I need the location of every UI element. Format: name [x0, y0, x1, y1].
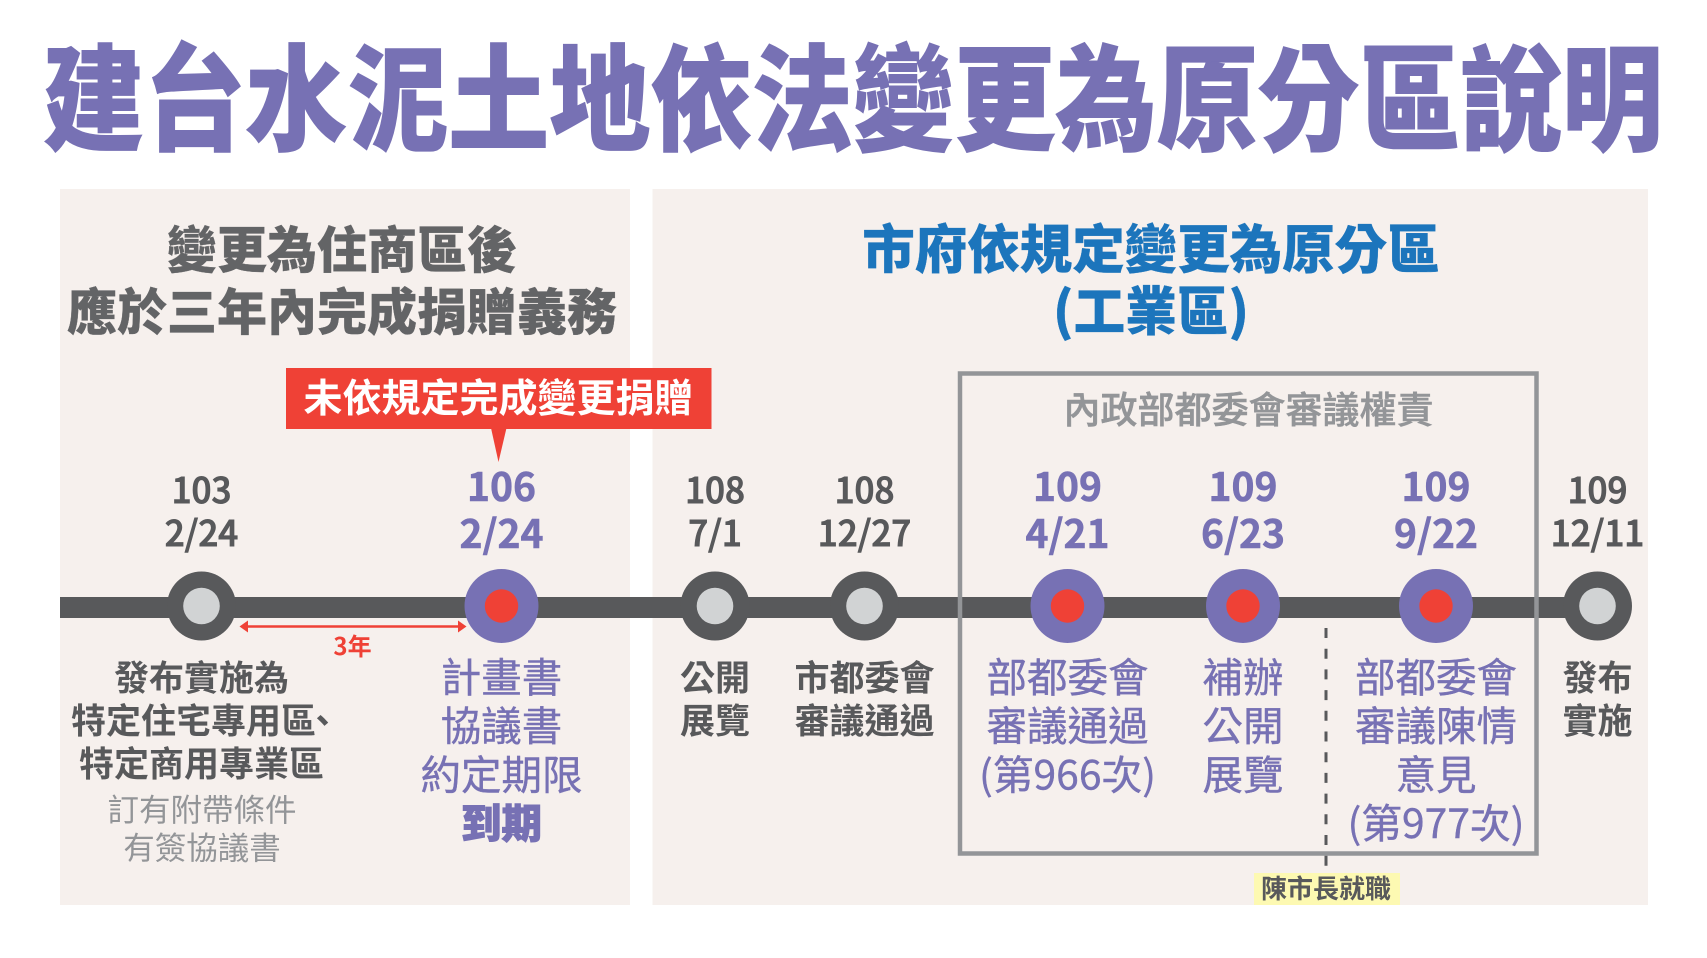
node: 109 9/22: 9/22 [1394, 504, 1478, 560]
node: 109 4/21: 4/21 [1025, 504, 1110, 560]
node: 106 2/24: 協議書 [441, 694, 562, 752]
node: 108 7/1: 7/1 [688, 506, 742, 557]
heading: right panel [862, 208, 1440, 346]
node: 109 6/23: 109 [1208, 457, 1278, 513]
node: 103 2/24: 特定住宅專用區、 [71, 694, 340, 744]
node: 103 2/24: 特定商用專業區 [79, 736, 324, 788]
node: 109 6/23: 補辦 [1202, 645, 1284, 704]
review committee box: 內政部都委會審議權責 [1064, 380, 1434, 434]
node: 109 4/21: 109 [1033, 457, 1102, 513]
node: 106 2/24: 2/24 [459, 504, 544, 560]
node: 109 12/11: 實施 [1562, 694, 1633, 744]
node: 109 4/21: 審議通過 [986, 694, 1148, 752]
node: 109 12/11 [1551, 463, 1644, 744]
tag: mayor inauguration: 陳市長就職 [1261, 869, 1391, 906]
node: 109 4/21: (第966次) [979, 742, 1156, 802]
node: 103 2/24: 發布實施為 [114, 650, 289, 702]
arrow: three years: 3年 [333, 627, 372, 662]
review committee box [960, 374, 1536, 854]
node: 109 9/22: 意見 [1396, 742, 1476, 802]
node: 109 6/23: 展覽 [1202, 742, 1284, 802]
node: 108 12/27: 12/27 [818, 506, 911, 557]
node: 109 9/22: 部都委會 [1355, 645, 1517, 704]
node: 106 2/24: 計畫書 [441, 645, 562, 704]
node: 108 7/1 [680, 463, 750, 744]
node: 109 12/11: 12/11 [1551, 506, 1644, 557]
node: 109 6/23: 公開 [1202, 694, 1284, 752]
node: 106 2/24: 106 [467, 457, 536, 513]
dashed marker line [1324, 628, 1328, 867]
heading: right panel: (工業區) [1053, 270, 1249, 346]
node: 108 7/1: 公開 [680, 650, 750, 702]
node: 103 2/24: 2/24 [165, 506, 238, 557]
callout: red: 未依規定完成變更捐贈 [303, 368, 694, 424]
node: 108 12/27: 108 [835, 463, 894, 514]
node: 109 12/11: 109 [1568, 463, 1627, 514]
heading: right panel: 市府依規定變更為原分區 [862, 208, 1440, 284]
callout: red [286, 368, 712, 462]
node: 109 9/22: 109 [1401, 457, 1471, 513]
node: 103 2/24 [71, 463, 340, 869]
panel: left background [60, 189, 630, 905]
node: 109 9/22: (第977次) [1348, 791, 1524, 850]
node: 108 12/27: 市都委會 [794, 650, 935, 702]
heading: left panel [67, 211, 617, 345]
heading: left panel: 應於三年內完成捐贈義務 [67, 273, 617, 345]
node: 109 9/22: 審議陳情 [1355, 694, 1517, 752]
node: 108 12/27 [794, 463, 935, 744]
node: 108 7/1: 展覽 [680, 694, 750, 744]
node: 109 9/22 [1348, 457, 1524, 850]
node: 109 4/21: 部都委會 [986, 645, 1148, 704]
node: 106 2/24: 約定期限 [420, 742, 582, 802]
node: 109 4/21 [979, 457, 1156, 802]
node: 106 2/24: 到期 [461, 791, 542, 850]
arrow: three years [240, 620, 466, 662]
node: 108 7/1: 108 [685, 463, 745, 514]
node: 108 12/27: 審議通過 [794, 694, 935, 744]
heading: left panel: 變更為住商區後 [167, 211, 517, 283]
panel: right background [652, 189, 1648, 905]
node: 106 2/24 [420, 457, 582, 850]
node: 109 6/23: 6/23 [1201, 504, 1285, 560]
timeline bar [60, 597, 1597, 618]
node: 103 2/24: 訂有附帶條件 [107, 785, 297, 831]
node: 103 2/24: 103 [172, 463, 231, 514]
node: 109 12/11: 發布 [1562, 650, 1633, 702]
node: 103 2/24: 有簽協議書 [123, 823, 281, 869]
node: 109 6/23 [1201, 457, 1285, 802]
